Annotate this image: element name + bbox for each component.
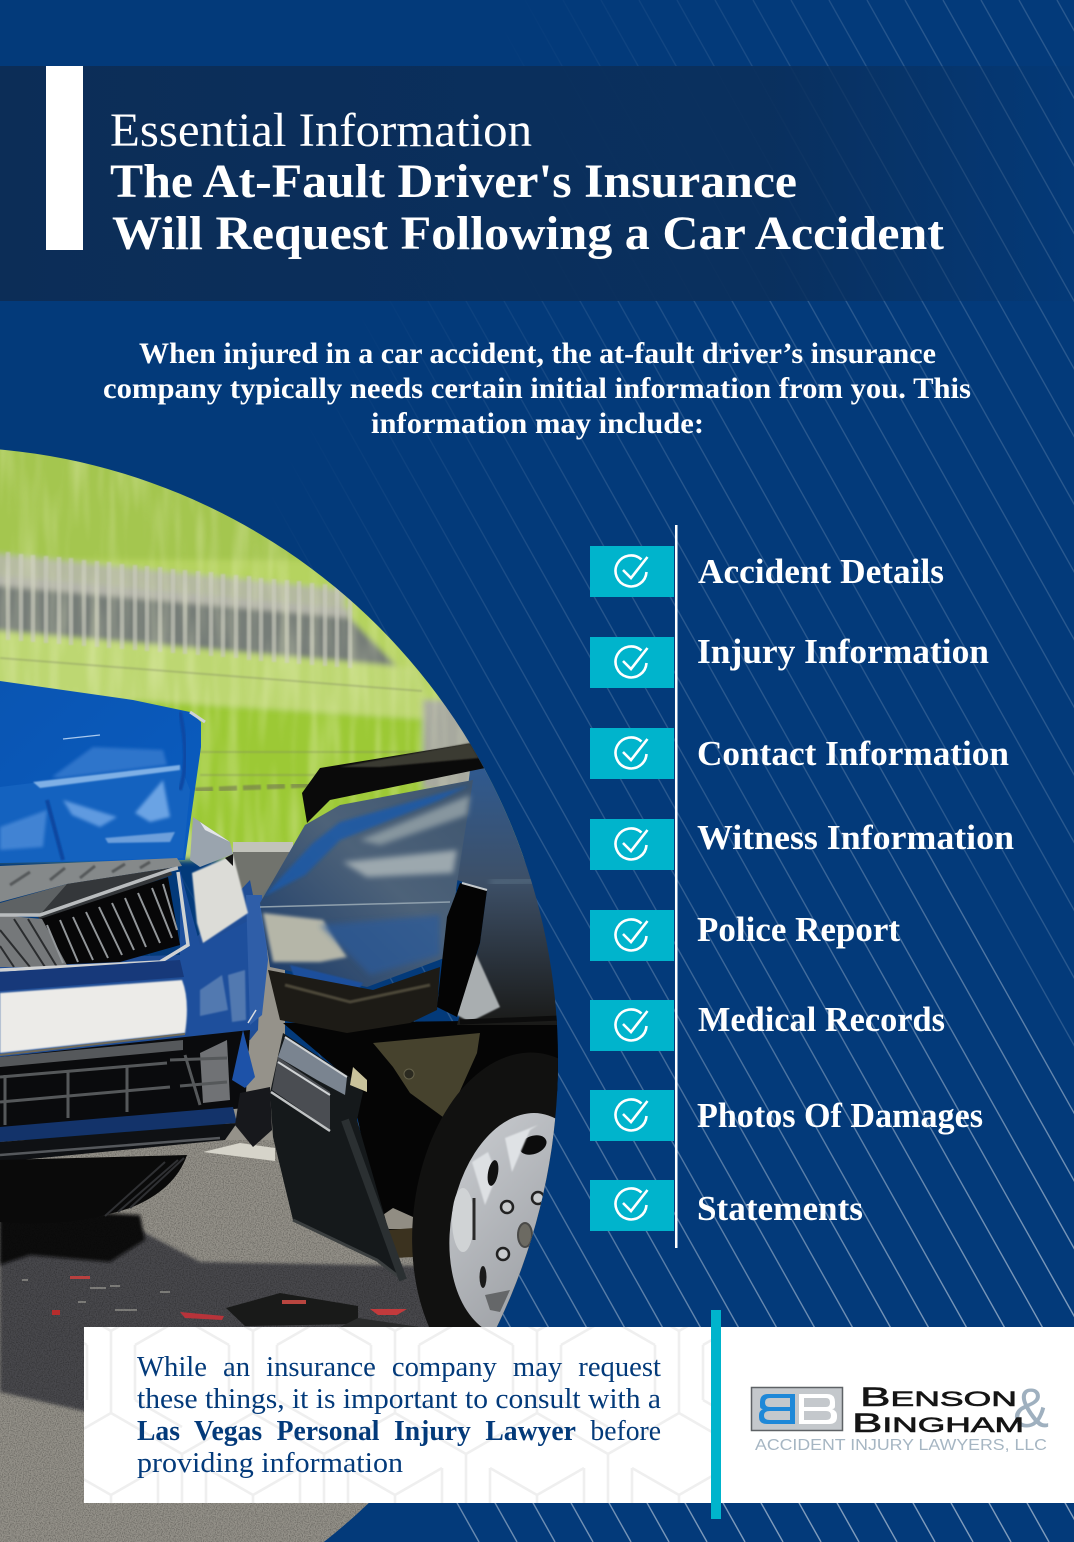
item: Contact Information: Contact Information bbox=[697, 735, 1009, 773]
item: Medical Records: Medical Records bbox=[698, 1001, 945, 1039]
white accent bar bbox=[46, 66, 83, 250]
blue car body bbox=[0, 880, 262, 1060]
note text: Las Vegas Personal Injury Lawyer before bbox=[137, 1415, 661, 1447]
fence bars bbox=[8, 552, 350, 668]
black hood edge bbox=[302, 743, 490, 823]
black pillar bbox=[437, 883, 560, 1022]
blue hood bbox=[0, 681, 205, 863]
intro text: When injured in a car accident, the at-fault driver’s insurance bbox=[139, 338, 936, 370]
logo name bbox=[852, 1382, 1024, 1438]
teal accent bar bbox=[711, 1310, 721, 1519]
title: The At-Fault Driver's Insurance bbox=[110, 155, 797, 208]
item: Accident Details: Accident Details bbox=[698, 553, 944, 591]
photo background: grass and fence bbox=[0, 440, 570, 952]
title: Will Request Following a Car Accident bbox=[112, 207, 944, 260]
blue car bbox=[0, 681, 272, 1223]
black car bbox=[260, 742, 558, 1327]
road debris bbox=[22, 1276, 420, 1327]
item: Witness Information: Witness Information bbox=[697, 819, 1014, 857]
item: Photos Of Damages bbox=[590, 1090, 983, 1141]
logo name: B ENSON bbox=[860, 1382, 1017, 1412]
road bbox=[0, 1140, 560, 1542]
header band bbox=[0, 66, 1074, 301]
logo icon bbox=[752, 1388, 842, 1430]
item: Injury Information bbox=[590, 633, 989, 688]
item: Statements: Statements bbox=[697, 1190, 863, 1228]
crash join piece bbox=[235, 1087, 272, 1147]
headlight bbox=[190, 817, 248, 943]
checklist divider bbox=[675, 525, 678, 1248]
item: Contact Information bbox=[590, 728, 1009, 779]
white plate area bbox=[0, 980, 187, 1053]
fender bbox=[260, 780, 473, 1033]
item: Statements bbox=[590, 1180, 863, 1231]
photo: crashed cars bbox=[0, 450, 558, 1542]
item: Injury Information: Injury Information bbox=[697, 633, 989, 671]
note text: While an insurance company may request bbox=[137, 1351, 661, 1383]
blue car tire bbox=[0, 1155, 187, 1223]
checklist bbox=[590, 546, 1014, 1231]
intro text: company typically needs certain initial information from you. This bbox=[103, 373, 971, 405]
right panel bbox=[457, 766, 557, 1025]
hood crumple metal band bbox=[0, 858, 182, 902]
item: Accident Details bbox=[590, 546, 944, 597]
road stripe bbox=[203, 1143, 275, 1161]
engine bay bbox=[283, 1020, 558, 1230]
wire fence bbox=[0, 658, 422, 775]
note panel bbox=[84, 1327, 712, 1503]
bumper strip bbox=[0, 960, 184, 991]
note text: these things, it is important to consult with a bbox=[137, 1383, 661, 1415]
title: Essential Information bbox=[110, 104, 532, 157]
note text: providing information bbox=[137, 1447, 404, 1479]
lower grille bbox=[0, 1030, 255, 1130]
logo name: B INGHAM bbox=[852, 1408, 1024, 1438]
item: Police Report: Police Report bbox=[697, 911, 901, 949]
note text bbox=[137, 1351, 661, 1479]
title bbox=[110, 104, 944, 260]
logo panel bbox=[721, 1327, 1074, 1503]
intro text: information may include: bbox=[371, 408, 704, 440]
road shadow bbox=[0, 1215, 440, 1412]
black bumper bbox=[270, 1033, 403, 1280]
item: Photos Of Damages: Photos Of Damages bbox=[697, 1097, 983, 1135]
item: Witness Information bbox=[590, 819, 1014, 870]
logo tagline: ACCIDENT INJURY LAWYERS, LLC bbox=[755, 1437, 1047, 1454]
wheel bbox=[412, 1052, 558, 1327]
logo ampersand: & bbox=[1013, 1376, 1049, 1439]
item: Medical Records bbox=[590, 1000, 945, 1051]
intro text bbox=[103, 338, 971, 440]
grille bbox=[0, 868, 188, 970]
item: Police Report bbox=[590, 910, 901, 961]
